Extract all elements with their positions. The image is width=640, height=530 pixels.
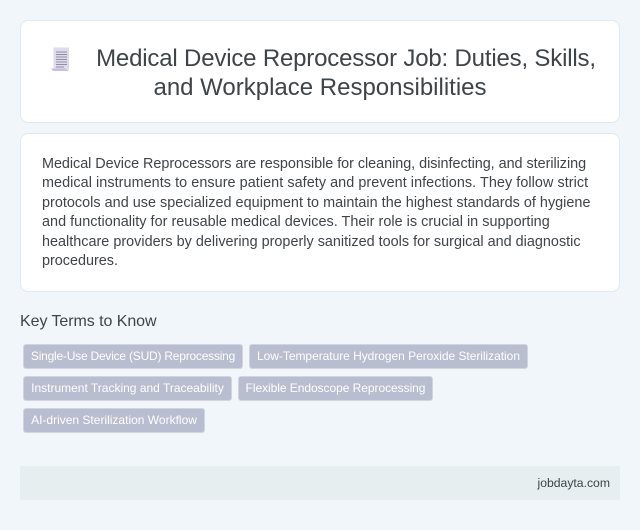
description text bbox=[42, 156, 590, 269]
icon: document bbox=[51, 48, 69, 71]
title: Medical Device Reprocessor Job: Duties, Skills, bbox=[96, 45, 596, 72]
footer text: jobdayta.com bbox=[538, 476, 610, 490]
chip: flexible endoscope bbox=[238, 376, 433, 401]
description text: Medical Device Reprocessors are responsible for cleaning, disinfecting, and sterilizing bbox=[42, 156, 586, 172]
chip: SUD reprocessing bbox=[23, 344, 243, 369]
chip: flexible endoscope: Flexible Endoscope Reprocessing bbox=[246, 381, 425, 395]
header panel bbox=[20, 20, 620, 123]
title bbox=[96, 45, 596, 101]
chip: hydrogen peroxide bbox=[249, 344, 528, 369]
description text: medical instruments to ensure patient safety and prevent infections. They follow strict bbox=[42, 175, 588, 191]
heading: key terms: Key Terms to Know bbox=[20, 313, 157, 330]
chip: SUD reprocessing: Single-Use Device (SUD) Reprocessing bbox=[31, 349, 235, 363]
description panel bbox=[20, 133, 620, 292]
title: and Workplace Responsibilities bbox=[153, 74, 487, 101]
chip: instrument tracking: Instrument Tracking and Traceability bbox=[31, 381, 224, 395]
description text: healthcare providers by delivering properly sanitized tools for surgical and diagnostic bbox=[42, 234, 581, 250]
description text: procedures. bbox=[42, 253, 118, 269]
chip: AI-driven workflow bbox=[23, 408, 205, 433]
footer bar bbox=[20, 466, 620, 500]
chip: instrument tracking bbox=[23, 376, 232, 401]
description text: and functionality for reusable medical devices. Their role is crucial in supporting bbox=[42, 214, 550, 230]
chip: AI-driven workflow: AI-driven Sterilization Workflow bbox=[31, 413, 197, 427]
chip: hydrogen peroxide: Low-Temperature Hydrogen Peroxide Sterilization bbox=[257, 349, 520, 363]
description text: protocols and use specialized equipment to maintain the highest standards of hygiene bbox=[42, 194, 590, 210]
